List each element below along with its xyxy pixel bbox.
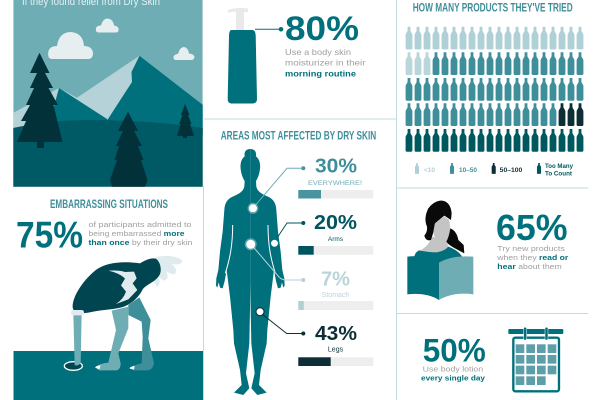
callout: stomach marker bbox=[245, 238, 305, 282]
icon: right pine tree bbox=[177, 104, 194, 138]
stat: stomach 7 percent: 7% bbox=[321, 269, 350, 291]
icon: pump bottle bbox=[228, 8, 283, 104]
text: morning routine description: Use a body skin bbox=[285, 47, 351, 57]
text: embarrassment description: of participants admitted to bbox=[88, 220, 192, 229]
icon: large cloud bbox=[48, 32, 93, 59]
icon: human body silhouette bbox=[216, 149, 285, 395]
text: embarrassment description: than once by their dry skin bbox=[88, 238, 192, 247]
stat: legs 43 percent bbox=[298, 323, 373, 366]
callout: legs marker bbox=[256, 308, 305, 336]
chart: bottle pictogram bbox=[406, 27, 583, 152]
icon: right cloud bbox=[173, 47, 194, 60]
legend: product counts: 50–100 bbox=[500, 167, 523, 174]
icon: centre pine tree bbox=[110, 112, 148, 187]
stat: everywhere 30 percent: 30% bbox=[315, 156, 357, 178]
text: daily lotion description: Use body lotion bbox=[423, 365, 483, 374]
text: new products description bbox=[496, 244, 568, 271]
stat: 50 percent: 50% bbox=[423, 333, 486, 369]
icon: ostrich bbox=[64, 256, 183, 370]
text: morning routine description: morning routine bbox=[285, 69, 356, 79]
legend: product counts: <10 bbox=[424, 167, 435, 174]
mountains bbox=[13, 56, 203, 135]
icon: left pine tree bbox=[17, 53, 62, 148]
ground bbox=[14, 351, 203, 400]
text: morning routine description: moisturizer in their bbox=[285, 58, 366, 68]
panel: landscape illustration bbox=[13, 0, 203, 187]
text: new products description: hear about them bbox=[497, 262, 562, 271]
stat: arms 20 percent bbox=[298, 212, 373, 255]
legend: product counts: Too Many bbox=[545, 163, 573, 170]
hill bbox=[13, 120, 203, 187]
text: daily lotion description: every single day bbox=[421, 374, 486, 383]
legend: product counts: 10–50 bbox=[459, 167, 477, 174]
icon: small cloud bbox=[96, 18, 119, 32]
stat: 75 percent: 75% bbox=[16, 215, 83, 256]
stat: legs 43 percent: 43% bbox=[315, 323, 357, 345]
text: new products description: when they read or bbox=[496, 253, 568, 262]
icon: calendar bbox=[508, 327, 563, 391]
stat: 80 percent: 80% bbox=[285, 10, 359, 48]
legend: product counts bbox=[415, 163, 573, 178]
text: daily lotion description bbox=[421, 365, 486, 383]
stat: 65 percent: 65% bbox=[496, 207, 568, 248]
text: embarrassment description bbox=[88, 220, 192, 247]
stat: stomach 7 percent: Stomach bbox=[322, 292, 349, 299]
stat: everywhere 30 percent bbox=[298, 156, 373, 198]
text: embarrassment description: being embarrassed more bbox=[88, 229, 184, 238]
stat: arms 20 percent: Arms bbox=[328, 236, 344, 243]
legend: product counts: To Count bbox=[545, 171, 573, 178]
icon: woman reading book bbox=[407, 201, 473, 300]
callout: arms marker bbox=[271, 221, 305, 247]
text: new products description: Try new products bbox=[497, 244, 565, 253]
stat: stomach 7 percent bbox=[298, 269, 373, 310]
heading: embarrassing situations: EMBARRASSING SITUATIONS bbox=[50, 199, 168, 211]
stat: legs 43 percent: Legs bbox=[328, 347, 344, 354]
heading: areas most affected: AREAS MOST AFFECTED BY DRY SKIN bbox=[221, 130, 376, 142]
text: morning routine description bbox=[285, 47, 366, 79]
callout: everywhere marker bbox=[248, 166, 305, 214]
stat: arms 20 percent: 20% bbox=[314, 212, 357, 234]
stat: everywhere 30 percent: EVERYWHERE! bbox=[308, 180, 362, 187]
